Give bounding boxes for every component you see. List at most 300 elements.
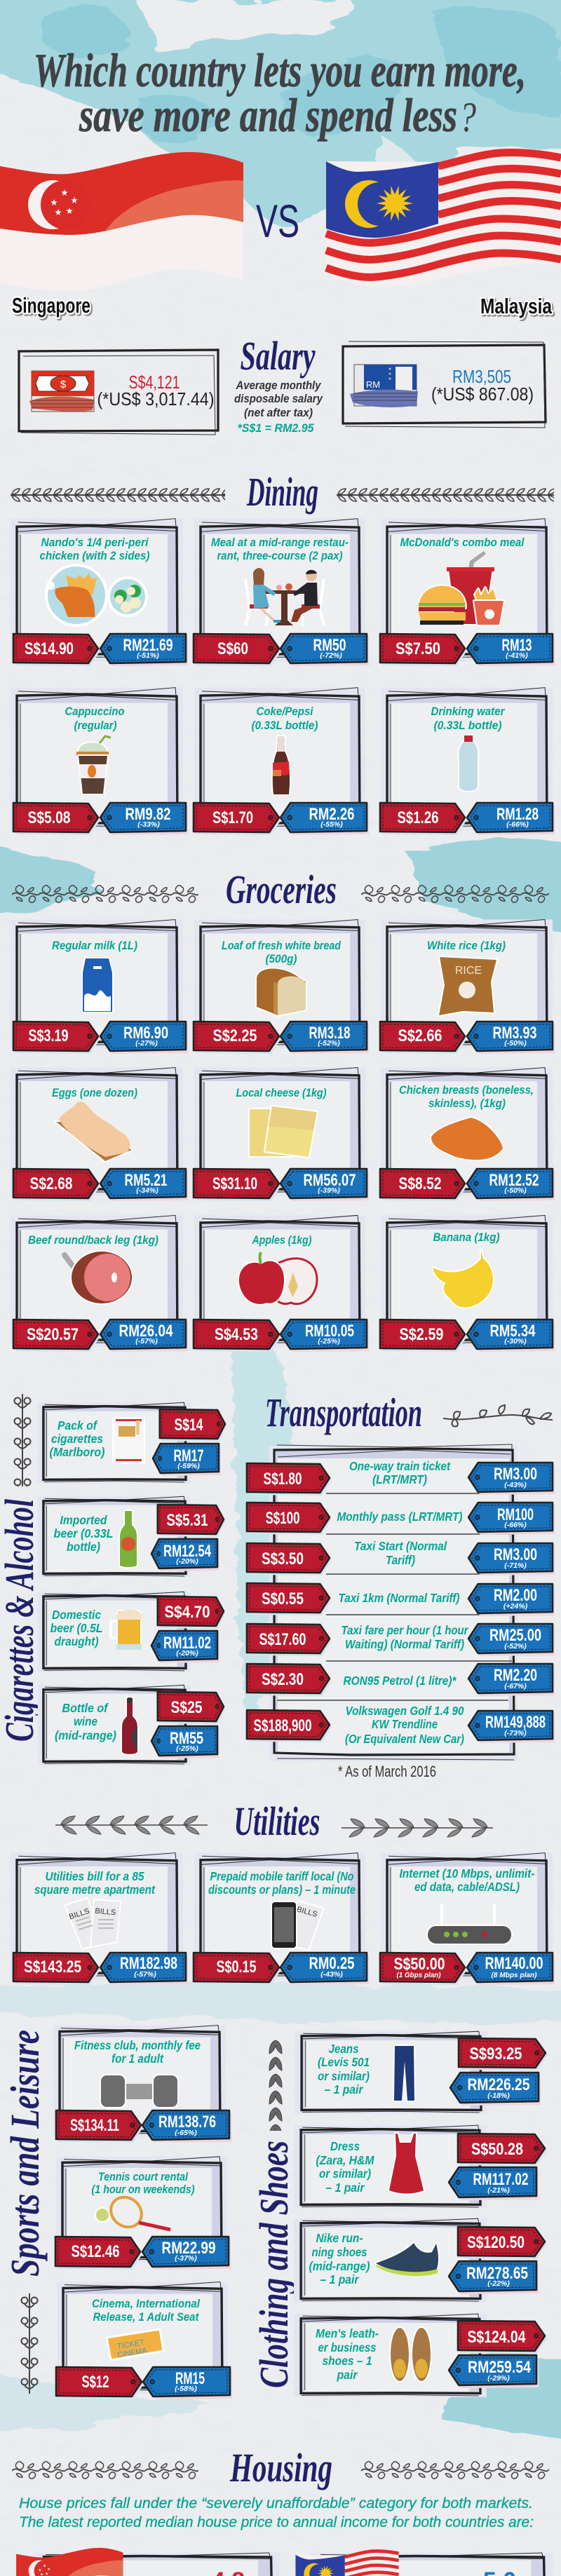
- row: taxi 1km: [247, 1583, 555, 1616]
- icon: bills: BILLS: [68, 1907, 90, 1921]
- price tag: Malaysia: (-72%): [320, 651, 342, 660]
- price tag: Singapore: [380, 1953, 467, 1985]
- item name: [251, 705, 318, 732]
- item name: White rice (1kg): [427, 940, 506, 952]
- price tag: Malaysia: RM56.07: [303, 1171, 356, 1190]
- row: taxi waiting: Taxi fare per hour (1 hour: [341, 1623, 469, 1637]
- price tag: Singapore: [194, 1022, 281, 1054]
- item name: Loaf of fresh white bread: [222, 940, 342, 952]
- item name: Chicken breasts (boneless,: [399, 1084, 534, 1097]
- price tag: Singapore: [194, 1953, 281, 1985]
- row: petrol: [247, 1664, 555, 1696]
- salary description: (net after tax): [244, 406, 313, 419]
- price tag: Singapore: S$124.04: [467, 2328, 526, 2347]
- price tag: Malaysia: RM182.98: [120, 1954, 177, 1973]
- price tag: Malaysia: (-41%): [506, 651, 528, 660]
- row: car: (Or Equivalent New Car): [345, 1732, 464, 1746]
- price tag: Singapore: S$60: [217, 639, 248, 658]
- item name: (500g): [265, 953, 297, 965]
- price tag: Malaysia: RM50: [313, 636, 346, 655]
- row: taxi waiting: RM25.00: [489, 1626, 541, 1645]
- item name: [91, 2171, 195, 2196]
- item name: beer (0.5L: [50, 1621, 102, 1635]
- price tag: Singapore: [380, 1320, 467, 1352]
- icon: cola bottle: [273, 736, 290, 794]
- row: petrol: RON95 Petrol (1 litre)*: [344, 1674, 457, 1688]
- item name: [55, 1701, 116, 1742]
- panel: sports and leisure: [2, 2026, 232, 2399]
- salary value: Malaysia: (*US$ 867.08): [431, 384, 534, 405]
- icon: phone and bill: BILLS: [296, 1905, 318, 1919]
- card: banana: [380, 1215, 555, 1352]
- price tag: Malaysia: (-65%): [175, 2129, 197, 2137]
- price tag: Malaysia: [467, 1320, 555, 1352]
- price tag: Singapore: S$2.68: [29, 1174, 73, 1193]
- row: taxi waiting: (-52%): [504, 1642, 527, 1650]
- item name: shoes – 1: [323, 2354, 372, 2368]
- price tag: Singapore: [458, 2227, 547, 2259]
- item name: draught): [55, 1634, 99, 1648]
- item name: [92, 2298, 200, 2324]
- icon: rice sack: [439, 957, 496, 1015]
- price tag: Singapore: S$0.15: [216, 1958, 257, 1977]
- item name: [39, 536, 150, 562]
- item name: (Levis 501: [318, 2055, 370, 2069]
- card: mid-range meal: [194, 519, 369, 666]
- price tag: Singapore: S$93.25: [470, 2045, 522, 2063]
- price tag: Malaysia: (-57%): [134, 1970, 156, 1979]
- item name: Regular milk (1L): [52, 940, 137, 952]
- price tag: Malaysia: [280, 634, 369, 666]
- heading: groceries: [12, 867, 549, 912]
- price tag: Malaysia: RM2.26: [309, 805, 355, 824]
- price tag: Singapore: [56, 2110, 143, 2143]
- price tag: Malaysia: (-50%): [504, 1186, 527, 1195]
- price tag: Singapore: S$50.00: [394, 1955, 445, 1974]
- item name: [400, 1866, 535, 1894]
- icon: ham: [65, 1252, 132, 1303]
- card: internet: [380, 1853, 555, 1985]
- row: car: KW Trendline: [372, 1717, 438, 1731]
- icon: router: [428, 1904, 511, 1944]
- heading: groceries: Groceries: [226, 867, 337, 912]
- salary value: Malaysia: [431, 366, 534, 405]
- title: [34, 43, 526, 142]
- item name: Prepaid mobile tariff local (No: [210, 1869, 354, 1883]
- row: taxi waiting: [247, 1623, 555, 1656]
- price tag: Malaysia: RM140.00: [485, 1954, 543, 1973]
- price tag: Singapore: [459, 2038, 548, 2070]
- price tag: Singapore: [13, 803, 100, 835]
- card: rice: [380, 919, 555, 1054]
- price tag: Singapore: [380, 634, 467, 666]
- price tag: Singapore: [458, 2134, 547, 2166]
- price tag: Malaysia: (-39%): [318, 1186, 340, 1195]
- price tag: Malaysia: (-57%): [135, 1337, 158, 1345]
- price tag: Singapore: S$5.31: [167, 1511, 208, 1530]
- salary value: Malaysia: RM3,505: [452, 366, 511, 387]
- item name: [53, 1513, 114, 1554]
- housing description: House prices fall under the “severely unaffordable” category for both markets.: [19, 2495, 533, 2511]
- flag: Singapore: [0, 152, 243, 291]
- price tag: Singapore: S$50.28: [471, 2140, 523, 2159]
- price tag: Malaysia: (-21%): [487, 2186, 510, 2195]
- item name: (0.33L bottle): [433, 719, 502, 732]
- VS label: VS: [256, 195, 299, 247]
- item name: Nike run-: [316, 2231, 363, 2245]
- price tag: Singapore: (1 Gbps plan): [397, 1971, 441, 1979]
- price tag: Malaysia: [280, 1169, 369, 1201]
- row: car: S$188,900: [254, 1716, 311, 1735]
- price tag: Malaysia: (-50%): [504, 1039, 527, 1048]
- price tag: Malaysia: RM5.34: [489, 1322, 536, 1341]
- price tag: Malaysia: (-58%): [175, 2385, 197, 2393]
- price tag: Singapore: [56, 2367, 144, 2399]
- item name: Utilities bill for a 85: [45, 1869, 144, 1883]
- price tag: Singapore: S$12: [81, 2373, 109, 2392]
- item name: Coke/Pepsi: [257, 705, 313, 718]
- card: wine: [38, 1685, 225, 1765]
- item name: Imported: [60, 1513, 107, 1527]
- item name: [431, 705, 506, 732]
- price tag: Malaysia: [143, 2367, 232, 2399]
- price tag: Singapore: S$143.25: [24, 1958, 81, 1977]
- price tag: Singapore: S$2.25: [213, 1026, 257, 1045]
- card: chicken breasts: [380, 1068, 555, 1201]
- item name: ed data, cable/ADSL): [414, 1880, 520, 1894]
- price tag: Singapore: [13, 1953, 100, 1985]
- row: petrol: S$2.30: [262, 1670, 304, 1689]
- card: fitness club: [53, 2026, 231, 2143]
- item name: McDonald's combo meal: [400, 536, 525, 549]
- panel: transportation: [247, 1390, 555, 1780]
- price tag: Malaysia: [100, 1169, 188, 1201]
- price tag: Singapore: S$1.70: [212, 808, 253, 827]
- icon: milk carton: [83, 958, 112, 1012]
- card: Malaysia housing ratio: [295, 2549, 553, 2576]
- item name: skinless), (1kg): [428, 1097, 506, 1110]
- item name: Apples (1kg): [252, 1234, 312, 1247]
- price tag: Singapore: S$4.53: [215, 1325, 258, 1344]
- price tag: Malaysia: [449, 2167, 539, 2200]
- price tag: Malaysia: [142, 2237, 231, 2270]
- item name: [74, 2038, 201, 2066]
- price tag: Malaysia: RM12.54: [163, 1542, 211, 1561]
- salary value: Singapore: [97, 372, 215, 409]
- card: McDonald's combo: [380, 519, 555, 666]
- price tag: Malaysia: [280, 1320, 369, 1352]
- item name: (mid-range): [55, 1728, 116, 1742]
- price tag: Malaysia: RM138.76: [158, 2113, 216, 2131]
- card: apples: [194, 1215, 369, 1352]
- item name: er business: [318, 2340, 377, 2354]
- flag: Singapore small: [16, 2548, 123, 2576]
- icon: wine bottle: [122, 1697, 137, 1754]
- icon: beer mug: [111, 1610, 142, 1650]
- price tag: Singapore: [194, 1169, 281, 1201]
- salary description: Average monthly: [236, 379, 322, 392]
- row: monthly pass: (-66%): [504, 1521, 527, 1529]
- price tag: Singapore: [194, 803, 281, 835]
- title: ?: [459, 94, 476, 140]
- panel: utilities: [11, 1798, 555, 1985]
- item name: Banana (1kg): [433, 1231, 500, 1244]
- item name: Release, 1 Adult Seat: [93, 2311, 200, 2324]
- price tag: Malaysia: [142, 2110, 231, 2143]
- price tag: Malaysia: [151, 1726, 219, 1758]
- item name: Meal at a mid-range restau-: [211, 536, 349, 549]
- item name: or similar): [318, 2069, 370, 2083]
- icon: Malaysia banknotes: [350, 365, 418, 407]
- price tag: Malaysia: RM13: [502, 636, 532, 655]
- row: petrol: (-67%): [504, 1682, 527, 1690]
- price tag: Singapore: [158, 1597, 225, 1629]
- item name: pair: [337, 2368, 358, 2382]
- icon: phone and bill: [272, 1902, 323, 1949]
- row: taxi waiting: S$17.60: [259, 1630, 306, 1649]
- item name: – 1 pair: [324, 2082, 364, 2096]
- item name: beer (0.33L: [53, 1526, 114, 1540]
- item name: [34, 1869, 156, 1897]
- item name: – 1 pair: [325, 2181, 365, 2195]
- price tag: Singapore: [194, 1320, 281, 1352]
- item name: [399, 1084, 534, 1110]
- icon: chicken plate: [46, 565, 147, 625]
- heading: transportation: Transportation: [265, 1390, 422, 1435]
- icon: Malaysia banknotes: RM: [366, 379, 380, 390]
- price tag: Malaysia: [280, 803, 369, 835]
- price tag: Malaysia: [100, 634, 188, 666]
- row: taxi start: S$3.50: [262, 1550, 304, 1568]
- price tag: Malaysia: [153, 1444, 220, 1476]
- price tag: Malaysia: RM6.90: [123, 1024, 168, 1043]
- salary value: Singapore: S$4,121: [129, 372, 180, 393]
- price tag: Malaysia: [100, 1953, 188, 1985]
- card: eggs: [11, 1068, 188, 1201]
- panel: cigarettes and alcohol: [0, 1394, 227, 1765]
- flag: Malaysia: [326, 148, 561, 287]
- price tag: Singapore: S$2.66: [398, 1026, 442, 1045]
- price tag: Malaysia: [100, 1320, 188, 1352]
- icon: cigarette pack: [114, 1418, 144, 1463]
- price tag: Singapore: S$14.90: [25, 639, 74, 658]
- price tag: Malaysia: RM0.25: [309, 1954, 355, 1973]
- card: utilities bill: [11, 1853, 188, 1985]
- price tag: Singapore: [380, 1169, 467, 1201]
- card: imported beer: [38, 1496, 225, 1578]
- price tag: Malaysia: RM26.04: [119, 1322, 173, 1341]
- item name: [316, 2139, 374, 2195]
- card: drinking water: [380, 688, 555, 835]
- price tag: Malaysia: RM15: [175, 2369, 205, 2388]
- panel: dining: [11, 469, 555, 835]
- row: one-way train ticket: S$1.80: [264, 1470, 302, 1489]
- card: running shoes: [294, 2218, 547, 2303]
- row: taxi start: Tariff): [386, 1553, 415, 1567]
- price tag: Malaysia: RM9.82: [125, 805, 171, 824]
- item name: for 1 adult: [111, 2052, 164, 2066]
- price tag: Singapore: S$25: [171, 1698, 202, 1717]
- row: taxi 1km: RM2.00: [494, 1586, 537, 1605]
- item name: [49, 1418, 105, 1459]
- item name: Cappuccino: [65, 705, 125, 718]
- row: one-way train ticket: (-43%): [504, 1481, 527, 1489]
- price tag: Malaysia: (8 Mbps plan): [491, 1971, 537, 1979]
- price tag: Singapore: S$8.52: [398, 1174, 442, 1193]
- salary card: Malaysia: [343, 341, 546, 428]
- icon: jeans: [394, 2046, 414, 2101]
- price tag: Singapore: S$20.57: [27, 1325, 79, 1344]
- icon: bills: BILLS: [95, 1907, 116, 1917]
- icon: Singapore banknotes: [29, 371, 94, 412]
- price tag: Singapore: [13, 1022, 100, 1054]
- price tag: Malaysia: RM3.18: [309, 1024, 351, 1043]
- icon: rice sack: RICE: [455, 965, 482, 977]
- row: taxi waiting: Waiting) (Normal Tariff): [345, 1637, 464, 1651]
- price tag: Singapore: [13, 1320, 100, 1352]
- heading: dining: [11, 469, 554, 515]
- price tag: Malaysia: (-25%): [318, 1337, 340, 1345]
- price tag: Malaysia: (-30%): [504, 1337, 527, 1345]
- heading: salary: Salary: [240, 333, 316, 379]
- icon: running shoe: [376, 2243, 438, 2276]
- price tag: Singapore: [158, 1505, 225, 1537]
- icon: tennis racket: [96, 2191, 170, 2233]
- icon: bread loaf: [257, 969, 306, 1015]
- item name: Men's leath-: [316, 2326, 379, 2340]
- item name: Nando's 1/4 peri-peri: [41, 536, 149, 549]
- price tag: Singapore: S$1.26: [397, 808, 439, 827]
- price tag: Malaysia: (-29%): [487, 2374, 510, 2382]
- price tag: Singapore: S$3.19: [28, 1026, 69, 1045]
- item name: cigarettes: [51, 1432, 103, 1446]
- heading: clothing and shoes: Clothing and Shoes: [251, 2141, 297, 2388]
- price tag: Malaysia: RM12.52: [489, 1171, 539, 1190]
- row: monthly pass: S$100: [265, 1509, 300, 1528]
- row: taxi start: [247, 1539, 555, 1575]
- item name: Beef round/back leg (1kg): [28, 1234, 158, 1247]
- item name: [318, 2042, 370, 2096]
- row: monthly pass: RM100: [497, 1505, 534, 1524]
- price tag: Malaysia: [450, 2073, 541, 2106]
- icon: cheese slices: [250, 1106, 317, 1157]
- price tag: Malaysia: RM10.05: [305, 1322, 354, 1341]
- card: bread: [194, 919, 369, 1054]
- label: Singapore: Singapore: [12, 293, 90, 318]
- price tag: Malaysia: [151, 1631, 219, 1663]
- footnote: * As of March 2016: [338, 1763, 436, 1780]
- price tag: Singapore: S$4.70: [164, 1603, 210, 1622]
- decoration: vertical vine: [13, 1394, 32, 1486]
- card: leather shoes: [294, 2314, 547, 2397]
- item name: Bottle of: [62, 1701, 109, 1715]
- price tag: Singapore: [380, 1022, 467, 1054]
- price tag: Malaysia: [151, 1539, 219, 1571]
- price tag: Malaysia: (-52%): [318, 1039, 340, 1048]
- icon: cinema ticket: [107, 2329, 163, 2360]
- item name: bottle): [67, 1540, 100, 1554]
- decoration: vertical vine: [20, 2293, 39, 2394]
- panel: clothing and shoes: [251, 2031, 548, 2397]
- item name: (0.33L bottle): [251, 719, 318, 732]
- salary value: Singapore: (*US$ 3,017.44): [97, 388, 215, 409]
- heading: housing: Housing: [229, 2445, 332, 2490]
- price tag: Singapore: S$31.10: [212, 1174, 257, 1193]
- icon: dumbbell: [101, 2075, 177, 2107]
- icon: egg tray: [56, 1101, 132, 1161]
- price tag: Singapore: S$2.59: [400, 1325, 443, 1344]
- item name: Cinema, International: [92, 2298, 200, 2310]
- item name: chicken (with 2 sides): [39, 550, 150, 562]
- item name: Pack of: [58, 1418, 98, 1432]
- item name: (1 hour on weekends): [91, 2183, 195, 2196]
- panel: groceries: [11, 867, 555, 1352]
- price tag: Malaysia: RM5.21: [125, 1171, 167, 1190]
- price tag: Singapore: [13, 634, 100, 666]
- price tag: Malaysia: (-27%): [135, 1039, 158, 1048]
- icon: coffee cup: [76, 736, 111, 794]
- price tag: Singapore: S$134.11: [70, 2116, 119, 2135]
- row: one-way train ticket: One-way train ticket: [349, 1459, 451, 1473]
- item name: Local cheese (1kg): [236, 1087, 327, 1099]
- icon: water bottle: [459, 735, 478, 791]
- item name: rant, three-course (2 pax): [217, 550, 343, 562]
- icon: burger combo: [419, 551, 503, 625]
- row: taxi 1km: (+24%): [503, 1602, 528, 1611]
- item name: discounts or plans) – 1 minute: [208, 1883, 356, 1897]
- card: cheese: [194, 1068, 369, 1201]
- row: taxi 1km: S$0.55: [262, 1589, 304, 1608]
- heading: dining: Dining: [246, 469, 318, 515]
- panel: salary: [19, 333, 546, 435]
- transport frame: [269, 1444, 518, 1761]
- price tag: Malaysia: [467, 1953, 555, 1985]
- item name: or similar): [319, 2167, 371, 2181]
- item name: (mid-range): [309, 2259, 370, 2273]
- price tag: Malaysia: [449, 2355, 539, 2388]
- price tag: Malaysia: (-37%): [175, 2254, 197, 2263]
- housing description: [19, 2495, 534, 2530]
- price tag: Singapore: [458, 2321, 547, 2354]
- icon: bananas: [433, 1251, 493, 1308]
- price tag: Singapore: S$5.08: [28, 808, 70, 827]
- panel: housing: [12, 2445, 553, 2576]
- item name: [316, 2326, 379, 2382]
- row: one-way train ticket: RM3.00: [494, 1465, 537, 1484]
- heading: sports and leisure: Sports and Leisure: [2, 2030, 48, 2277]
- flag: Malaysia small: [295, 2549, 399, 2576]
- heading: utilities: [55, 1798, 493, 1844]
- price tag: Malaysia: RM22.99: [161, 2239, 216, 2258]
- price tag: Singapore: [13, 1169, 100, 1201]
- price tag: Malaysia: RM278.65: [466, 2264, 528, 2283]
- salary card: Singapore: [19, 350, 218, 435]
- housing description: The latest reported median house price to annual income for both countries are:: [19, 2514, 534, 2530]
- price tag: Malaysia: (-55%): [320, 820, 343, 829]
- item name: Domestic: [52, 1608, 101, 1622]
- price tag: Malaysia: [280, 1953, 369, 1985]
- salary description: *S$1 = RM2.95: [237, 421, 314, 435]
- price tag: Malaysia: RM17: [174, 1446, 203, 1465]
- price tag: Malaysia: [467, 803, 555, 835]
- row: petrol: RM2.20: [494, 1666, 537, 1685]
- price tag: Singapore: [380, 803, 467, 835]
- row: taxi start: (-71%): [504, 1561, 527, 1570]
- item name: [222, 940, 342, 965]
- row: monthly pass: [247, 1503, 555, 1535]
- price tag: Malaysia: (-18%): [487, 2092, 510, 2100]
- card: cappuccino: [11, 688, 188, 835]
